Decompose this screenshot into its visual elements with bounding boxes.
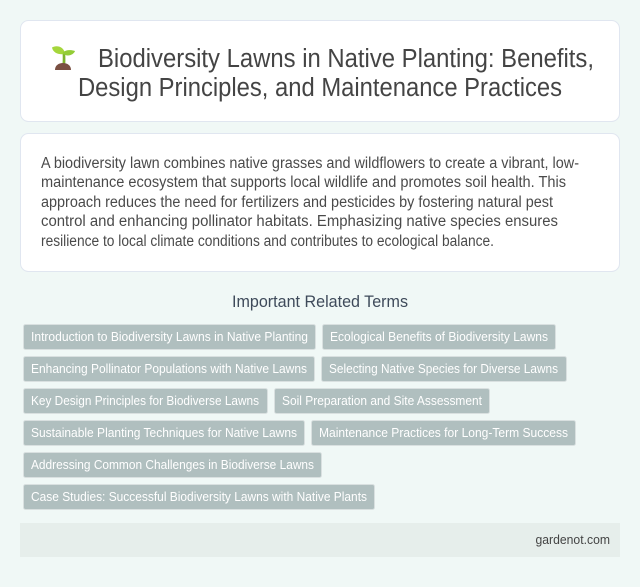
tag: introduction [24, 324, 316, 350]
tag: common challenges [24, 452, 322, 478]
icon: seedling [52, 46, 75, 70]
tag: maintenance [312, 420, 576, 446]
tag: case studies: Case Studies: Successful Biodiversity Lawns with Native Plants [31, 489, 367, 504]
tag: common challenges: Addressing Common Challenges in Biodiverse Lawns [31, 457, 314, 472]
tag: selecting species: Selecting Native Species for Diverse Lawns [329, 361, 558, 376]
tag: pollinator populations [24, 356, 314, 382]
text block: description: resilience to local climate conditions and contributes to ecological balance. [41, 233, 494, 250]
tag: ecological benefits: Ecological Benefits of Biodiversity Lawns [330, 329, 548, 344]
text block: description: maintenance ecosystem that supports local wildlife and promotes soil health. This [41, 174, 566, 191]
tag: ecological benefits [322, 324, 556, 350]
title [78, 45, 594, 102]
title: Design Principles, and Maintenance Practices [78, 74, 562, 102]
tag: planting techniques: Sustainable Planting Techniques for Native Lawns [31, 425, 297, 440]
heading: related terms: Important Related Terms [232, 293, 408, 311]
tag: soil preparation: Soil Preparation and Site Assessment [282, 393, 482, 408]
text block: description: A biodiversity lawn combines native grasses and wildflowers to create a vibrant, low- [41, 155, 579, 172]
text block: description [41, 155, 579, 250]
tag: planting techniques [24, 420, 304, 446]
text block: description: control and enhancing pollinator habitats. Emphasizing native species ensures [41, 213, 558, 230]
tag: maintenance: Maintenance Practices for Long-Term Success [319, 425, 568, 440]
tag: case studies [24, 484, 374, 510]
footer [20, 523, 620, 557]
tag: selecting species [322, 356, 566, 382]
title: Biodiversity Lawns in Native Planting: Benefits, [98, 45, 594, 73]
tag: design principles: Key Design Principles for Biodiverse Lawns [31, 393, 259, 408]
panel: title card [20, 20, 620, 122]
text block: description: approach reduces the need for fertilizers and pesticides by fostering natural pest [41, 194, 554, 211]
panel: introduction [20, 134, 620, 272]
footer: gardenot.com [536, 532, 610, 547]
tag: soil preparation [274, 388, 490, 414]
tag: introduction: Introduction to Biodiversity Lawns in Native Planting [31, 329, 308, 344]
tag: pollinator populations: Enhancing Pollinator Populations with Native Lawns [31, 361, 307, 376]
tag: design principles [24, 388, 268, 414]
